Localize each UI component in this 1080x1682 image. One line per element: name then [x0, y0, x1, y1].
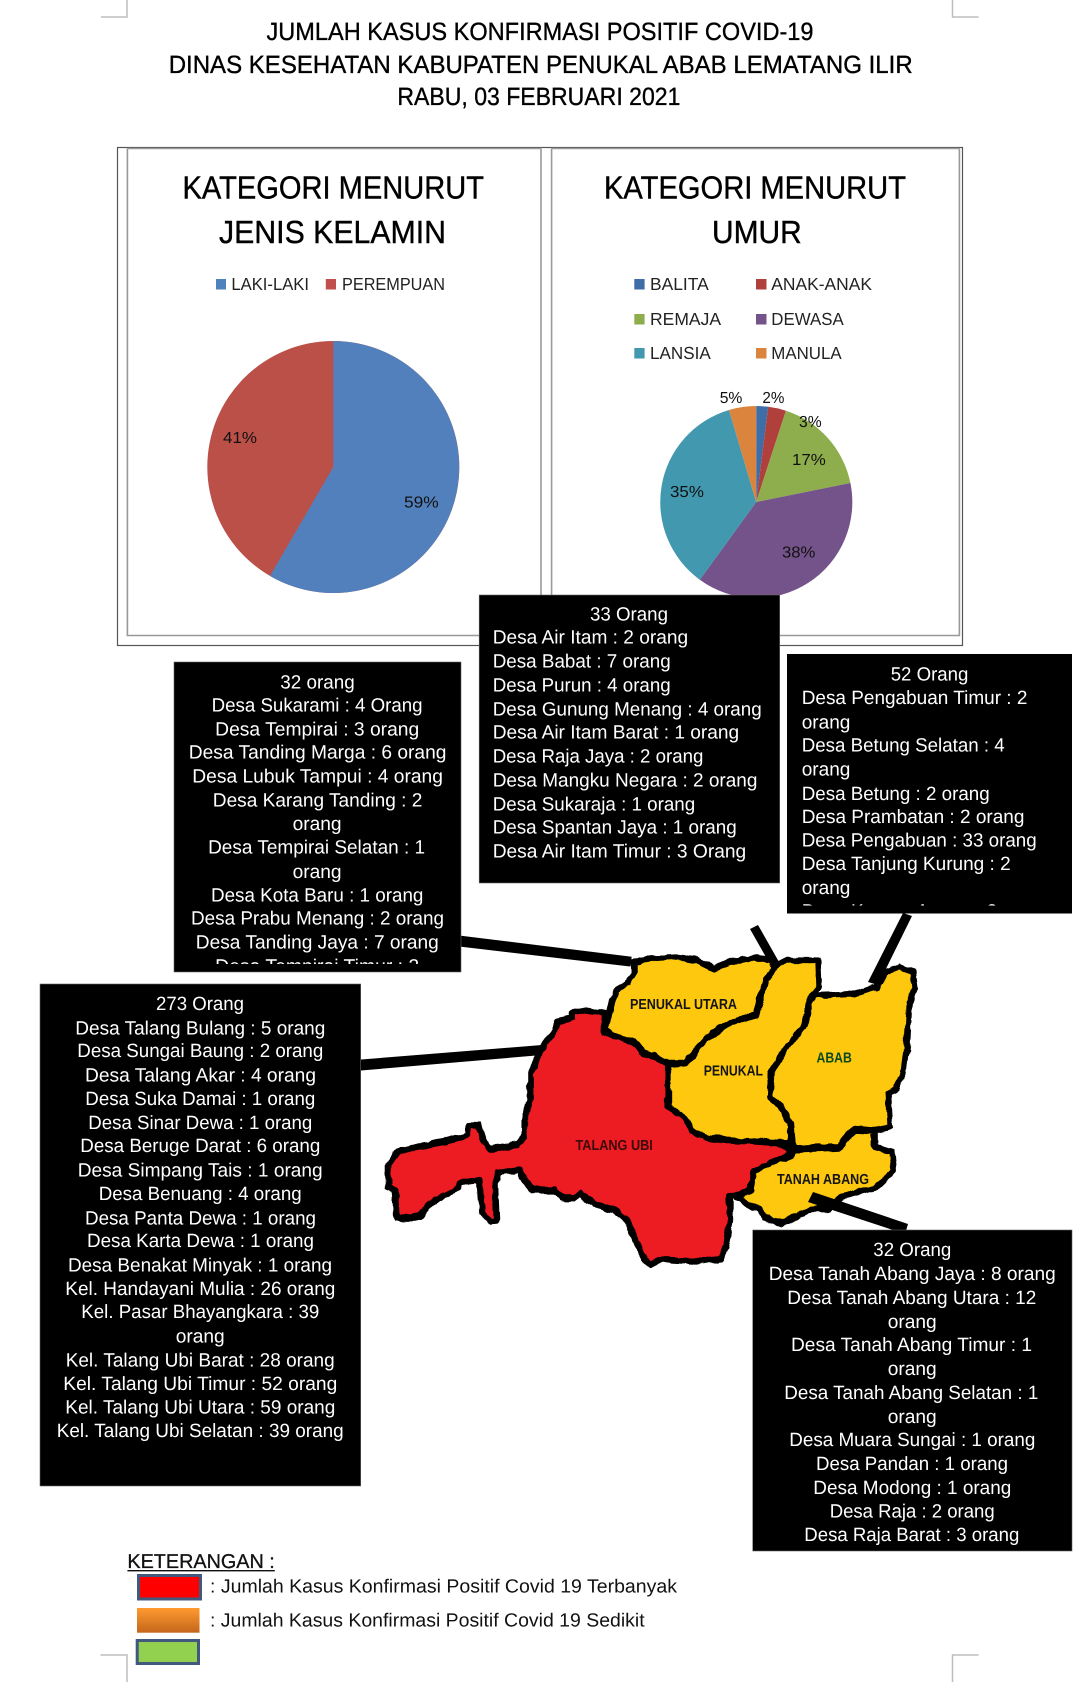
pie chart: age: 3% [799, 414, 822, 431]
heading: age: UMUR [712, 214, 802, 250]
callout: Talang Ubi 273 orang: Kel. Talang Ubi Utara : 59 orang [65, 1398, 335, 1418]
callout: Talang Ubi 273 orang: Desa Benakat Minyak : 1 orang [68, 1256, 332, 1276]
pie chart: age: 2% [762, 390, 784, 407]
callout: Tanah Abang 32 orang: orang [888, 1359, 937, 1380]
pie chart: gender: 59% [404, 495, 439, 512]
legend heading: KETERANGAN : [127, 1551, 275, 1573]
callout: Talang Ubi 273 orang: Desa Beruge Darat : 6 orang [80, 1136, 320, 1157]
map labels: PENUKAL UTARA [630, 997, 737, 1013]
callout: Tanah Abang 32 orang: Desa Pandan : 1 orang [816, 1454, 1008, 1475]
callout: Abab 52 orang: orang [802, 878, 850, 899]
legend: age: MANULA [771, 343, 842, 363]
callout: Tanah Abang 32 orang: Desa Tanah Abang Selatan : 1 [784, 1383, 1038, 1404]
callout: Talang Ubi 273 orang: Desa Karta Dewa : 1 orang [87, 1231, 314, 1252]
callout: Tanah Abang 32 orang: Desa Raja Barat : 3 orang [804, 1525, 1019, 1546]
pie chart: age [660, 390, 852, 598]
callout: Tanah Abang 32 orang: Desa Tanah Abang Jaya : 8 orang [769, 1264, 1056, 1285]
pie chart: age: 38% [782, 545, 815, 562]
callout: Penukal Utara 32 orang: Desa Kota Baru : 1 orang [211, 886, 423, 907]
callout: Penukal 33 orang: Desa Air Itam : 2 orang [493, 627, 688, 648]
callout: Penukal 33 orang: Desa Mangku Negara : 2 orang [493, 771, 757, 792]
region: Abab [769, 967, 915, 1148]
callout: Abab 52 orang [787, 654, 1072, 923]
callout: Penukal Utara 32 orang: Desa Tanding Jaya : 7 orang [196, 932, 439, 953]
callout: Talang Ubi 273 orang: 273 Orang [156, 994, 244, 1015]
callout: Penukal Utara 32 orang: Desa Tempirai : 3 orang [215, 720, 419, 741]
callout: Talang Ubi 273 orang: Desa Sinar Dewa : 1 orang [88, 1113, 312, 1134]
callout: Talang Ubi 273 orang [40, 984, 361, 1486]
chart frame [118, 148, 962, 646]
callout: Talang Ubi 273 orang: Desa Talang Akar : 4 orang [85, 1066, 316, 1086]
map labels: TANAH ABANG [777, 1172, 869, 1188]
title [169, 18, 913, 111]
pie chart: gender: 41% [223, 430, 257, 447]
map labels: PENUKAL [704, 1064, 763, 1080]
legend: keterangan [127, 1551, 678, 1664]
callout: Abab 52 orang: Desa Tanjung Kurung : 2 [802, 854, 1011, 875]
panel: gender chart [182, 170, 484, 593]
legend item: green [137, 1640, 198, 1664]
callout: Abab 52 orang: 52 Orang [891, 665, 968, 686]
callout: Penukal 33 orang: Desa Air Itam Barat : 1 orang [493, 723, 739, 744]
map labels [576, 997, 869, 1188]
callout: Talang Ubi 273 orang: Kel. Talang Ubi Selatan : 39 orang [57, 1421, 344, 1442]
callout: Penukal 33 orang: Desa Spantan Jaya : 1 orang [493, 818, 737, 839]
callout: Talang Ubi 273 orang: Desa Suka Damai : 1 orang [85, 1089, 315, 1110]
pie chart: gender [207, 341, 459, 593]
map [388, 957, 915, 1265]
callout: Talang Ubi 273 orang: Kel. Handayani Mulia : 26 orang [65, 1279, 335, 1300]
region: Tanah Abang [737, 1130, 894, 1223]
legend: gender: PEREMPUAN [342, 274, 445, 294]
pie chart: age: 35% [670, 484, 704, 501]
legend: age: LANSIA [650, 343, 711, 363]
leader line: Tanah Abang [808, 1192, 908, 1234]
callout: Tanah Abang 32 orang: Desa Muara Sungai : 1 orang [789, 1430, 1035, 1451]
callout: Tanah Abang 32 orang: 32 Orang [873, 1240, 951, 1261]
legend: age: ANAK-ANAK [771, 274, 872, 294]
heading: gender: JENIS KELAMIN [219, 214, 446, 250]
callout: Talang Ubi 273 orang: Desa Simpang Tais : 1 orang [78, 1160, 323, 1182]
legend: age: REMAJA [650, 309, 721, 329]
callout: Tanah Abang 32 orang: orang [888, 1407, 937, 1428]
callout: Talang Ubi 273 orang: Desa Sungai Baung : 2 orang [77, 1041, 323, 1062]
callout: Penukal 33 orang: Desa Purun : 4 orang [493, 675, 671, 696]
callout: Talang Ubi 273 orang: Desa Benuang : 4 orang [99, 1184, 302, 1205]
callout: Tanah Abang 32 orang: orang [888, 1312, 937, 1333]
leader lines [355, 913, 912, 1071]
heading: gender: KATEGORI MENURUT [182, 170, 484, 206]
callout: Abab 52 orang: orang [802, 713, 850, 734]
map labels: ABAB [816, 1051, 852, 1067]
callout: Tanah Abang 32 orang: Desa Tanah Abang Timur : 1 [791, 1335, 1032, 1356]
callout: Tanah Abang 32 orang: Desa Modong : 1 orang [813, 1478, 1011, 1499]
title: RABU, 03 FEBRUARI 2021 [397, 83, 680, 111]
callout: Talang Ubi 273 orang: orang [176, 1326, 225, 1348]
callout: Penukal Utara 32 orang: orang [293, 862, 342, 883]
panel: age chart [604, 170, 906, 598]
callout: Penukal Utara 32 orang: Desa Prabu Menang : 2 orang [191, 908, 444, 929]
map regions [388, 957, 915, 1265]
legend: gender: LAKI-LAKI [231, 274, 309, 294]
heading: gender [182, 170, 484, 250]
callout: Abab 52 orang: Desa Prambatan : 2 orang [802, 807, 1024, 828]
callout: Abab 52 orang: orang [802, 759, 850, 780]
callout: Penukal Utara 32 orang: orang [293, 814, 342, 835]
callout: Penukal Utara 32 orang: Desa Lubuk Tampui : 4 orang [192, 767, 443, 788]
legend: age [634, 274, 872, 363]
heading: age [604, 170, 906, 250]
callout: Talang Ubi 273 orang: Kel. Pasar Bhayangkara : 39 [81, 1302, 319, 1323]
legend: gender [216, 274, 445, 294]
map labels: TALANG UBI [576, 1138, 653, 1154]
callout: Penukal Utara 32 orang: Desa Karang Tanding : 2 [213, 791, 422, 812]
callout: Talang Ubi 273 orang: Kel. Talang Ubi Timur : 52 orang [63, 1374, 337, 1395]
pie chart: age: 5% [720, 390, 742, 407]
callout: Penukal 33 orang [479, 595, 780, 883]
region: Talang Ubi [388, 1010, 791, 1265]
callout: Penukal Utara 32 orang: Desa Sukarami : 4 Orang [212, 696, 423, 717]
legend: age: DEWASA [771, 309, 844, 329]
region: Penukal [668, 960, 818, 1143]
callout: Penukal 33 orang: Desa Raja Jaya : 2 orang [493, 747, 703, 768]
callout: Talang Ubi 273 orang: Desa Talang Bulang : 5 orang [75, 1018, 325, 1040]
legend item: red: : Jumlah Kasus Konfirmasi Positif Covid 19 Terbanyak [210, 1577, 678, 1598]
callout: Talang Ubi 273 orang: Kel. Talang Ubi Barat : 28 orang [66, 1350, 335, 1372]
callout: Penukal 33 orang: 33 Orang [590, 605, 668, 626]
callout: Penukal 33 orang: Desa Sukaraja : 1 orang [493, 795, 695, 816]
callout: Talang Ubi 273 orang: Desa Panta Dewa : 1 orang [85, 1208, 316, 1230]
callout: Penukal Utara 32 orang: 32 orang [280, 672, 355, 693]
callout: Abab 52 orang: Desa Betung : 2 orang [802, 784, 990, 805]
title: DINAS KESEHATAN KABUPATEN PENUKAL ABAB LEMATANG ILIR [169, 51, 913, 79]
callout: Tanah Abang 32 orang [753, 1230, 1072, 1551]
callout: Penukal Utara 32 orang: Desa Tempirai Selatan : 1 [208, 838, 425, 859]
callout: Abab 52 orang: Desa Pengabuan : 33 orang [802, 831, 1037, 852]
callout: Abab 52 orang: Desa Betung Selatan : 4 [802, 735, 1005, 756]
callout: Penukal Utara 32 orang: Desa Tempirai Timur : 2 [215, 956, 419, 977]
region: Penukal Utara [605, 957, 775, 1063]
title: JUMLAH KASUS KONFIRMASI POSITIF COVID-19 [266, 18, 814, 46]
callout: Penukal Utara 32 orang [174, 662, 461, 977]
callout: Abab 52 orang: Desa Karang Agung : 2 orang [802, 902, 1051, 923]
pie chart: age: 17% [792, 452, 826, 469]
callout: Penukal 33 orang: Desa Gunung Menang : 4 orang [493, 700, 762, 721]
callout: Tanah Abang 32 orang: Desa Tanah Abang Utara : 12 [787, 1288, 1036, 1309]
legend: age: BALITA [650, 274, 709, 294]
callout: Tanah Abang 32 orang: Desa Raja : 2 orang [830, 1501, 995, 1522]
callout: Penukal 33 orang: Desa Air Itam Timur : 3 Orang [493, 842, 746, 863]
callout: Abab 52 orang: Desa Pengabuan Timur : 2 [802, 688, 1027, 709]
heading: age: KATEGORI MENURUT [604, 170, 906, 206]
legend item: orange: : Jumlah Kasus Konfirmasi Positif Covid 19 Sedikit [210, 1611, 645, 1632]
callout: Penukal 33 orang: Desa Babat : 7 orang [493, 652, 671, 673]
callout: Penukal Utara 32 orang: Desa Tanding Marga : 6 orang [189, 743, 446, 764]
